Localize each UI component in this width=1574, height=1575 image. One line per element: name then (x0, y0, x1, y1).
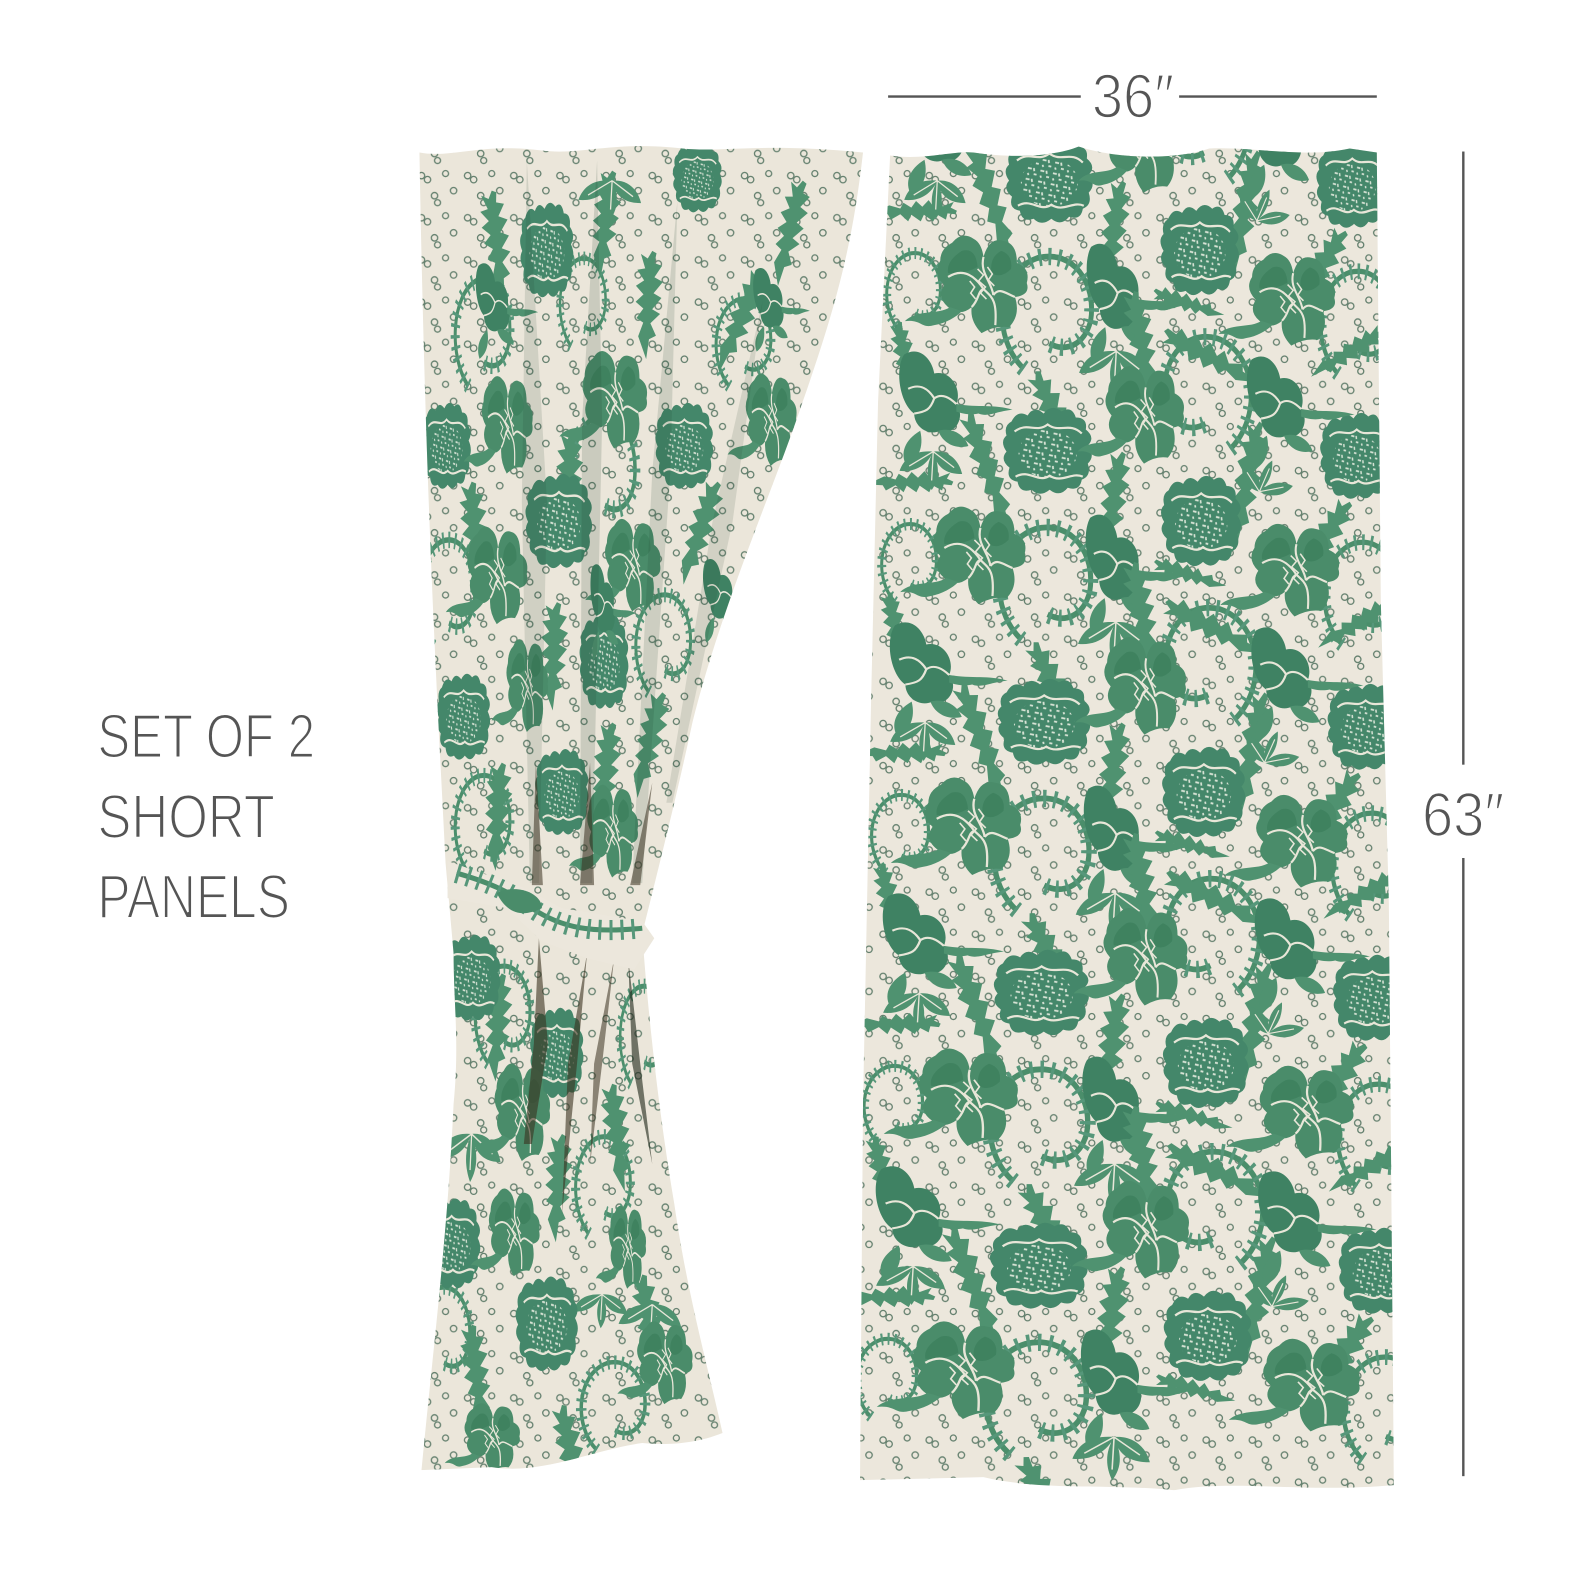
text: set of 2 short panels (97, 703, 315, 932)
pattern row 2 (867, 289, 1397, 746)
panel: right curtain flat (860, 146, 1394, 1490)
text: set of 2 short panels: SHORT (97, 783, 275, 852)
height dimension: 63 inches: 63″ (1422, 781, 1504, 850)
pattern row 3 (856, 560, 1408, 1017)
pattern row 1 (872, 18, 1392, 475)
vines on left curtain (415, 169, 816, 1514)
panel: left curtain tied back (411, 130, 873, 1514)
fabric folds on left curtain (522, 161, 763, 1214)
text: set of 2 short panels: SET OF 2 (97, 703, 315, 772)
text: set of 2 short panels: PANELS (97, 863, 290, 932)
flowers on left curtain (422, 144, 810, 1472)
pattern row 5 (860, 1106, 1394, 1486)
width dimension: 36 inches: 36″ (1092, 62, 1174, 131)
pattern row 4 (848, 831, 1416, 1288)
tie-back band (448, 861, 654, 969)
